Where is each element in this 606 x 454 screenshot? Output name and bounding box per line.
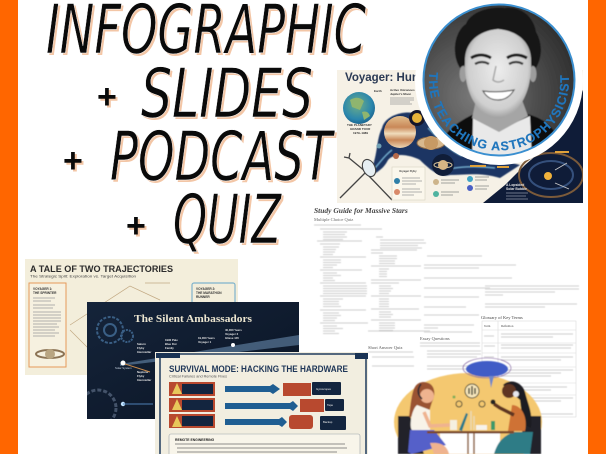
essay questions lines (420, 286, 579, 369)
right orange border (588, 0, 606, 454)
headphones (513, 391, 519, 397)
Voyager 1 card (29, 283, 66, 367)
title line: + QUIZ: QUIZ (175, 183, 284, 262)
face (465, 29, 531, 118)
Saturn (417, 136, 445, 150)
left person (408, 382, 450, 454)
slide subheading: Critical Failures and Remote Fixes (169, 374, 227, 378)
glow dots (120, 343, 235, 406)
Jupiter moons label: Active Volcanoes (390, 88, 415, 92)
timeline callouts: 40,000 Years (225, 328, 242, 332)
microphone stand (471, 411, 474, 430)
title (46, 0, 368, 262)
title line: + SLIDES: SLIDES (141, 55, 313, 134)
jacket (446, 114, 554, 150)
Voyager 2 card: VOYAGER 2: (196, 287, 215, 291)
title line: + PODCAST: + (65, 144, 85, 182)
podcast illustration (394, 358, 542, 454)
grand tour label: THE PLANETARY (347, 123, 372, 127)
wavy flight path (371, 113, 520, 178)
timeline callouts: Gliese 445 (225, 336, 239, 340)
title line: + QUIZ: + (126, 207, 146, 245)
ears (460, 66, 466, 82)
timeline callouts: Family (165, 346, 174, 350)
Io (410, 112, 424, 124)
portrait badge (415, 4, 583, 165)
failure row 3 (169, 414, 346, 430)
Earth (343, 92, 375, 124)
slide heading: SURVIVAL MODE: HACKING THE HARDWARE (169, 364, 348, 374)
title line: + SLIDES: + (97, 78, 117, 116)
failure row 1 (169, 382, 341, 396)
table (427, 431, 514, 434)
grand tour label: 1979–1989 (353, 131, 368, 135)
study guide subheading: Multiple Choice Quiz (314, 217, 353, 222)
Earth land (350, 98, 370, 120)
yellow backdrop (394, 373, 542, 454)
Jupiter (384, 116, 416, 148)
speech bubble (463, 358, 511, 388)
headphones (418, 384, 422, 399)
voyager heading: Voyager: Hunting (345, 72, 440, 84)
smile (483, 90, 514, 100)
orange mini labels (470, 152, 569, 167)
trajectory lines (70, 283, 170, 350)
right chair (511, 416, 541, 454)
face (502, 384, 516, 398)
essay questions heading: Essay Questions (420, 336, 450, 341)
right person (490, 381, 533, 454)
Solar System label: Solar System (115, 366, 132, 370)
neck (472, 100, 528, 132)
title line: + QUIZ (126, 181, 284, 262)
orange beam (125, 364, 150, 372)
gears (97, 317, 133, 343)
phone (490, 400, 496, 404)
hair (455, 8, 541, 68)
light beam (120, 335, 299, 366)
frame ornaments (156, 353, 368, 359)
Voyager spacecraft (340, 153, 392, 200)
slide heading: The Silent Ambassadors (134, 314, 252, 325)
title line: + SLIDES: SLIDES (143, 57, 315, 136)
badge text (429, 72, 569, 150)
face (420, 389, 434, 403)
Jupiter moons label (390, 88, 415, 104)
timeline callouts: Voyager 1 (198, 340, 212, 344)
left chair (398, 416, 424, 454)
remote engineering box (169, 434, 360, 454)
failure row 3: Backup (323, 420, 333, 424)
skirt (408, 430, 446, 454)
bubble caption: Solar Bubble (506, 187, 527, 191)
flyby dates box (392, 167, 425, 200)
title line: + SLIDES: + (99, 80, 119, 118)
timeline callouts: Voyager 2 (225, 332, 239, 336)
sound icons (452, 384, 485, 407)
solar bubble orbits (519, 153, 583, 197)
Jupiter moons label: Jupiter's Moon (390, 92, 411, 96)
hair (503, 381, 531, 428)
title line: + PODCAST: PODCAST (112, 120, 337, 199)
glossary table (481, 315, 576, 417)
title line: + QUIZ: + (128, 209, 148, 247)
timeline callouts: Neptune (137, 370, 149, 374)
dark space corner (483, 90, 583, 203)
title line: + PODCAST (63, 118, 337, 199)
small moons (393, 153, 399, 159)
study guide document (314, 206, 579, 417)
table legs (468, 433, 474, 454)
hair back (409, 382, 434, 417)
tablet and mugs (459, 413, 468, 431)
voyager infographic (337, 70, 583, 203)
title line: INFOGRAPHIC (46, 0, 368, 72)
slide: Survival Mode (155, 352, 368, 454)
timeline callouts: Blue Dot (165, 342, 177, 346)
timeline callouts: 1990 Pale (165, 338, 178, 342)
timeline callouts: Saturn (137, 342, 146, 346)
shirt (411, 405, 430, 430)
title line: + SLIDES (97, 55, 315, 136)
Voyager 2 card (191, 282, 236, 302)
portrait background (424, 6, 574, 134)
left orange border (0, 0, 18, 454)
short answer heading: Short Answer Quiz (368, 345, 402, 350)
portrait badge: THE TEACHING ASTROPHYSICIST (428, 72, 569, 150)
Voyager 1 card: VOYAGER 1: (33, 287, 52, 291)
timeline callouts: Interstellar (137, 378, 152, 382)
grand tour label (347, 124, 372, 134)
eyebrows (471, 55, 527, 58)
shirt (472, 116, 532, 160)
timeline callouts: Interstellar (137, 350, 152, 354)
remote engineering box: REMOTE ENGINEERING (175, 438, 215, 442)
slide: The Silent Ambassadors (80, 302, 299, 426)
Voyager 2 card: THE MARATHON (196, 291, 222, 295)
timeline callouts (137, 328, 242, 382)
failure row 2: Tape (327, 403, 334, 407)
glossary heading: Glossary of Key Terms (481, 315, 523, 320)
slide subheading: The Strategic Split: Exploration vs. Target Acquisition (30, 274, 136, 278)
Earth label: Earth (374, 89, 382, 93)
dark gear bottom (80, 390, 116, 426)
flyby dates box: Voyager Flyby (399, 169, 417, 173)
timeline callouts: 19,000 Years (198, 336, 215, 340)
quiz question lines (314, 225, 382, 334)
nose shadow (493, 66, 504, 82)
eyes (475, 62, 523, 64)
study guide title: Study Guide for Massive Stars (314, 206, 408, 215)
light swirl in flight path (375, 128, 495, 170)
title line: + PODCAST: PODCAST (110, 118, 335, 197)
title line: + QUIZ: QUIZ (173, 181, 282, 260)
arm (494, 404, 514, 415)
bubble caption (506, 183, 528, 199)
glossary table: Definition (501, 324, 514, 328)
title line: + PODCAST: + (63, 142, 83, 180)
Saturn badge (432, 154, 454, 176)
legs (430, 443, 449, 454)
Voyager 1 card: THE SPRINTER (33, 291, 57, 295)
arm (424, 412, 450, 426)
slide: A Tale of Two Trajectories (25, 259, 238, 375)
timeline callouts: Flyby (137, 374, 145, 378)
corner frame (160, 354, 366, 454)
quiz question lines column two (371, 237, 426, 330)
failure row 2 (169, 398, 344, 412)
timeline callouts: Flyby (137, 346, 145, 350)
glossary table: Term (484, 324, 491, 328)
bubble caption: A Lopsided (506, 183, 524, 187)
orange top (508, 405, 526, 431)
grand tour label: GRAND TOUR (350, 127, 371, 131)
short answer lines (424, 256, 516, 332)
failure row 1: Gyroscopes (316, 387, 332, 391)
Voyager 2 card: RUNNER (196, 295, 210, 299)
white floor under table (440, 433, 500, 454)
slide heading: A TALE OF TWO TRAJECTORIES (30, 264, 173, 274)
planet flyby dates (433, 176, 489, 197)
pants (494, 432, 533, 454)
